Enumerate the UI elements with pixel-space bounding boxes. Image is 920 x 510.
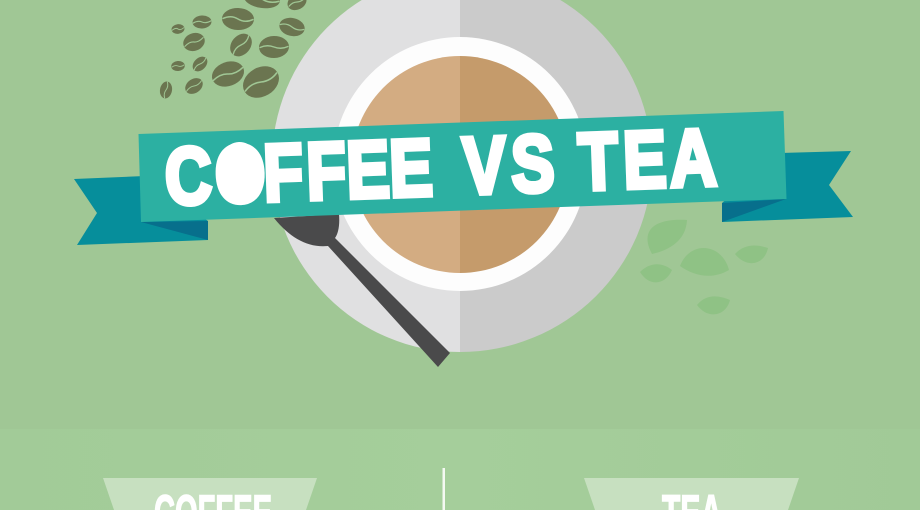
label tag: coffee — [103, 478, 317, 510]
divider line — [442, 468, 445, 510]
label tag: tea — [584, 478, 799, 510]
title: COFFEE VS TEA — [163, 112, 718, 222]
ribbon: right tail — [722, 151, 853, 222]
background: lower panel — [0, 429, 920, 510]
icon: cup of coffee and tea — [333, 37, 587, 291]
icon: tea leaves — [640, 220, 768, 314]
icon: coffee beans — [159, 0, 309, 104]
filled counter of the letter O — [216, 141, 264, 205]
icon: spoon — [274, 214, 450, 367]
ribbon: main banner — [138, 111, 786, 222]
icon: saucer — [272, 0, 652, 352]
ribbon: left tail — [74, 176, 208, 245]
